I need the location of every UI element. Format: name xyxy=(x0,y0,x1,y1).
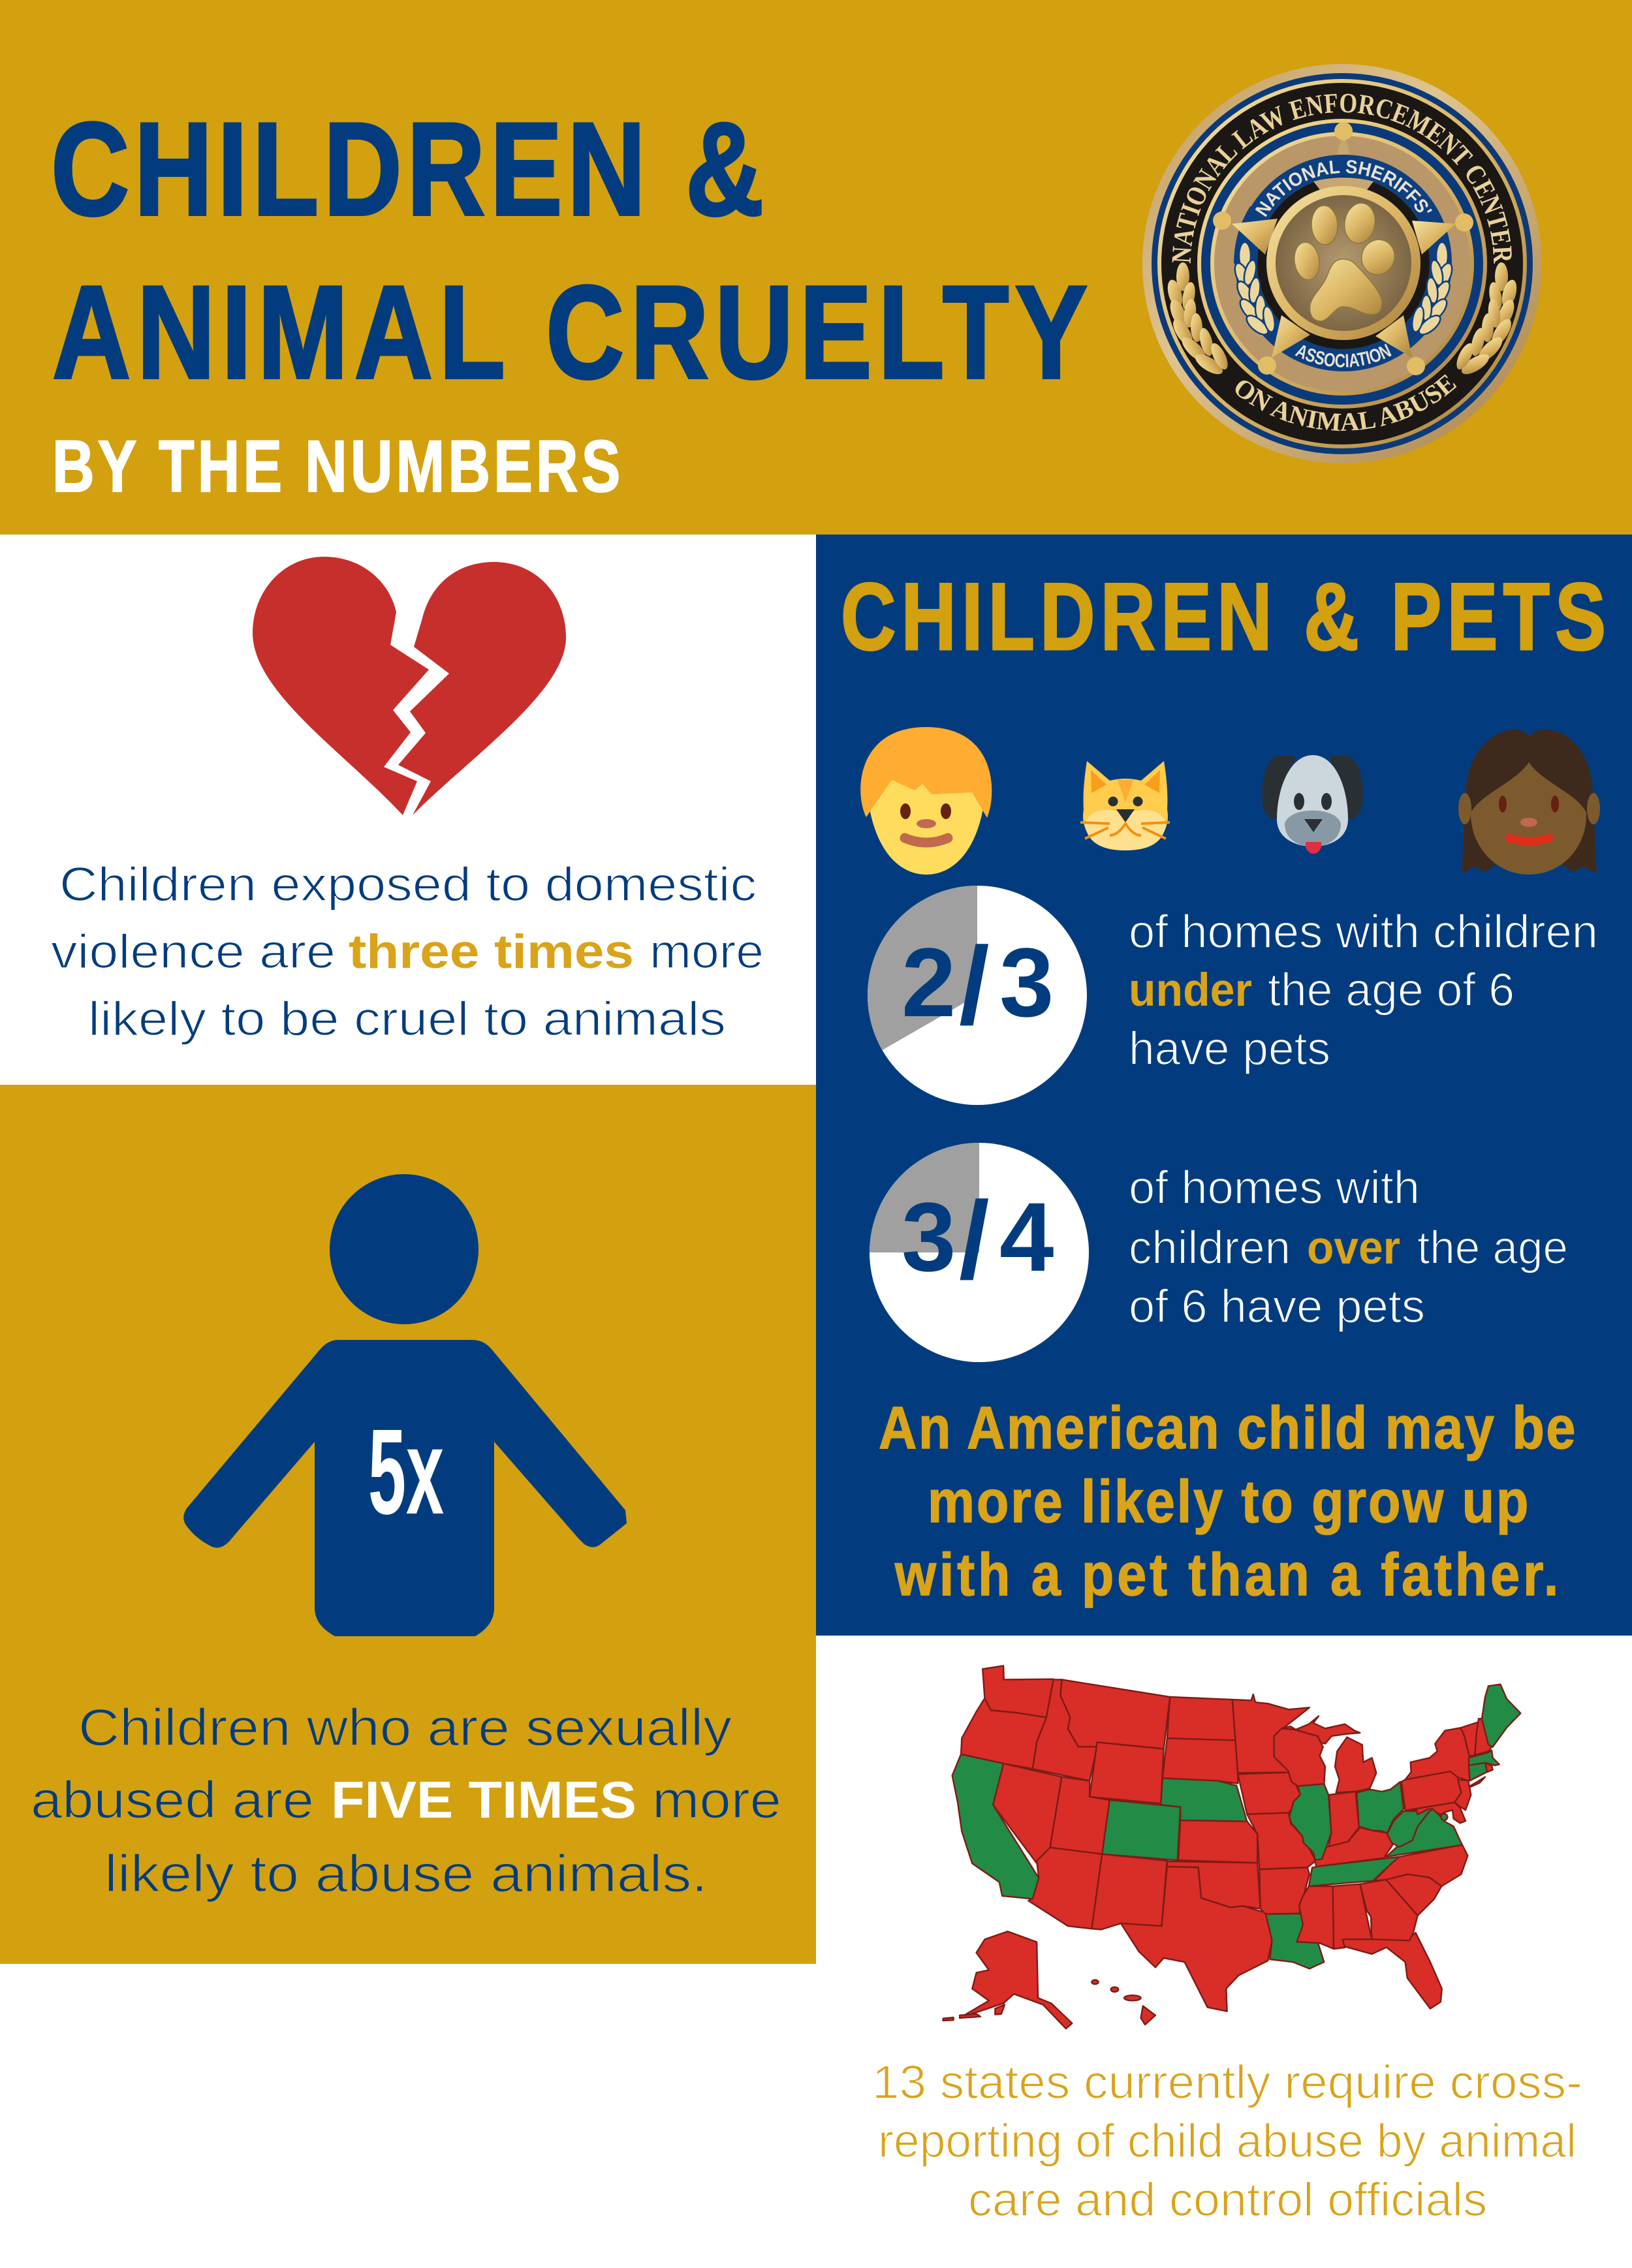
text: homes with children over 6: children xyxy=(1129,1222,1291,1274)
seal laurel leaves xyxy=(1165,262,1519,378)
icon: broken heart xyxy=(253,557,566,815)
text: cross-reporting caption: care and control officials xyxy=(968,2174,1487,2226)
icon label: 5x: 5x xyxy=(368,1405,444,1540)
text: homes with children over 6: of homes with xyxy=(1129,1162,1420,1214)
callout: pet than a father: with a pet than a father. xyxy=(894,1542,1558,1608)
pie label: 3/4: 4 xyxy=(999,1182,1054,1292)
pie chart: two thirds xyxy=(868,886,1087,1105)
text: five times more likely: abused are xyxy=(31,1771,314,1829)
text: five times more likely xyxy=(31,1698,781,1903)
text: three times more likely xyxy=(51,858,764,1046)
title: ANIMAL CRUELTY xyxy=(52,258,1088,407)
text: homes with children under 6: under xyxy=(1129,965,1252,1016)
text: three times more likely: three times xyxy=(349,925,634,978)
text: homes with children over 6: of 6 have pets xyxy=(1129,1281,1425,1333)
seal lower text: ON ANIMAL ABUSE xyxy=(1235,374,1457,431)
text: cross-reporting caption: reporting of child abuse by animal xyxy=(878,2115,1577,2167)
seal association text: ASSOCIATION xyxy=(1295,343,1392,367)
pie chart: three quarters xyxy=(870,1143,1089,1362)
callout: pet than a father: more likely to grow up xyxy=(928,1468,1528,1535)
text: five times more likely: more xyxy=(652,1771,781,1829)
callout: pet than a father: An American child may be xyxy=(879,1395,1575,1461)
text: homes with children under 6: the age of 6 xyxy=(1268,965,1514,1016)
map: US states with cross-reporting laws xyxy=(943,1666,1520,2028)
seal star arms xyxy=(1232,219,1456,358)
seal medallion with paw xyxy=(1266,186,1420,340)
subtitle: BY THE NUMBERS xyxy=(52,426,620,507)
panel: header xyxy=(0,0,1632,535)
icon: child figure xyxy=(183,1174,627,1636)
text: cross-reporting caption: 13 states currently require cross- xyxy=(872,2057,1582,2109)
heading: CHILDREN & PETS xyxy=(841,564,1606,670)
text: cross-reporting caption xyxy=(872,2057,1582,2226)
text: five times more likely: likely to abuse animals. xyxy=(104,1844,708,1903)
seal ribbon text: NATIONAL SHERIFFS' xyxy=(1255,160,1432,217)
text: homes with children under 6: have pets xyxy=(1129,1023,1330,1075)
title: CHILDREN & xyxy=(51,95,764,243)
text: homes with children over 6: over xyxy=(1307,1222,1400,1274)
pie label: 3/4: / xyxy=(959,1179,990,1301)
text: homes with children over 6 xyxy=(1129,1162,1568,1333)
icon: seal of the National Law Enforcement Center on Animal Abuse xyxy=(1142,64,1542,463)
pie label: 3/4: 3 xyxy=(902,1182,956,1292)
text: three times more likely: likely to be cruel to animals xyxy=(88,993,726,1046)
title xyxy=(51,95,1088,407)
seal inner ribbon xyxy=(1234,166,1441,360)
text: homes with children under 6 xyxy=(1129,907,1598,1075)
icon: boy face xyxy=(860,727,992,875)
text: three times more likely: more xyxy=(650,925,764,978)
text: five times more likely: Children who are sexually xyxy=(78,1698,732,1756)
seal star top point and ball studs xyxy=(1213,122,1473,375)
icon: girl face xyxy=(1458,730,1600,875)
text: homes with children under 6: of homes with children xyxy=(1129,907,1598,958)
icon: cat face xyxy=(1080,761,1170,850)
icon: dog face xyxy=(1262,755,1363,854)
panel: broken heart statistic xyxy=(0,535,816,1085)
seal inner laurel xyxy=(1232,242,1455,338)
text: five times more likely: FIVE TIMES xyxy=(331,1771,636,1829)
seal outer text: NATIONAL LAW ENFORCEMENT CENTER xyxy=(1172,94,1512,264)
panel: five times statistic xyxy=(0,1085,816,1964)
pie label: 2/3: 3 xyxy=(999,927,1054,1037)
callout: pet than a father xyxy=(879,1395,1575,1608)
panel: children and pets xyxy=(816,535,1632,1636)
text: homes with children over 6: the age xyxy=(1417,1222,1568,1274)
text: three times more likely: Children exposed to domestic xyxy=(59,858,757,911)
pie label: 2/3: 2 xyxy=(902,927,956,1037)
text: three times more likely: violence are xyxy=(51,925,336,978)
pie label: 2/3: / xyxy=(959,924,990,1047)
